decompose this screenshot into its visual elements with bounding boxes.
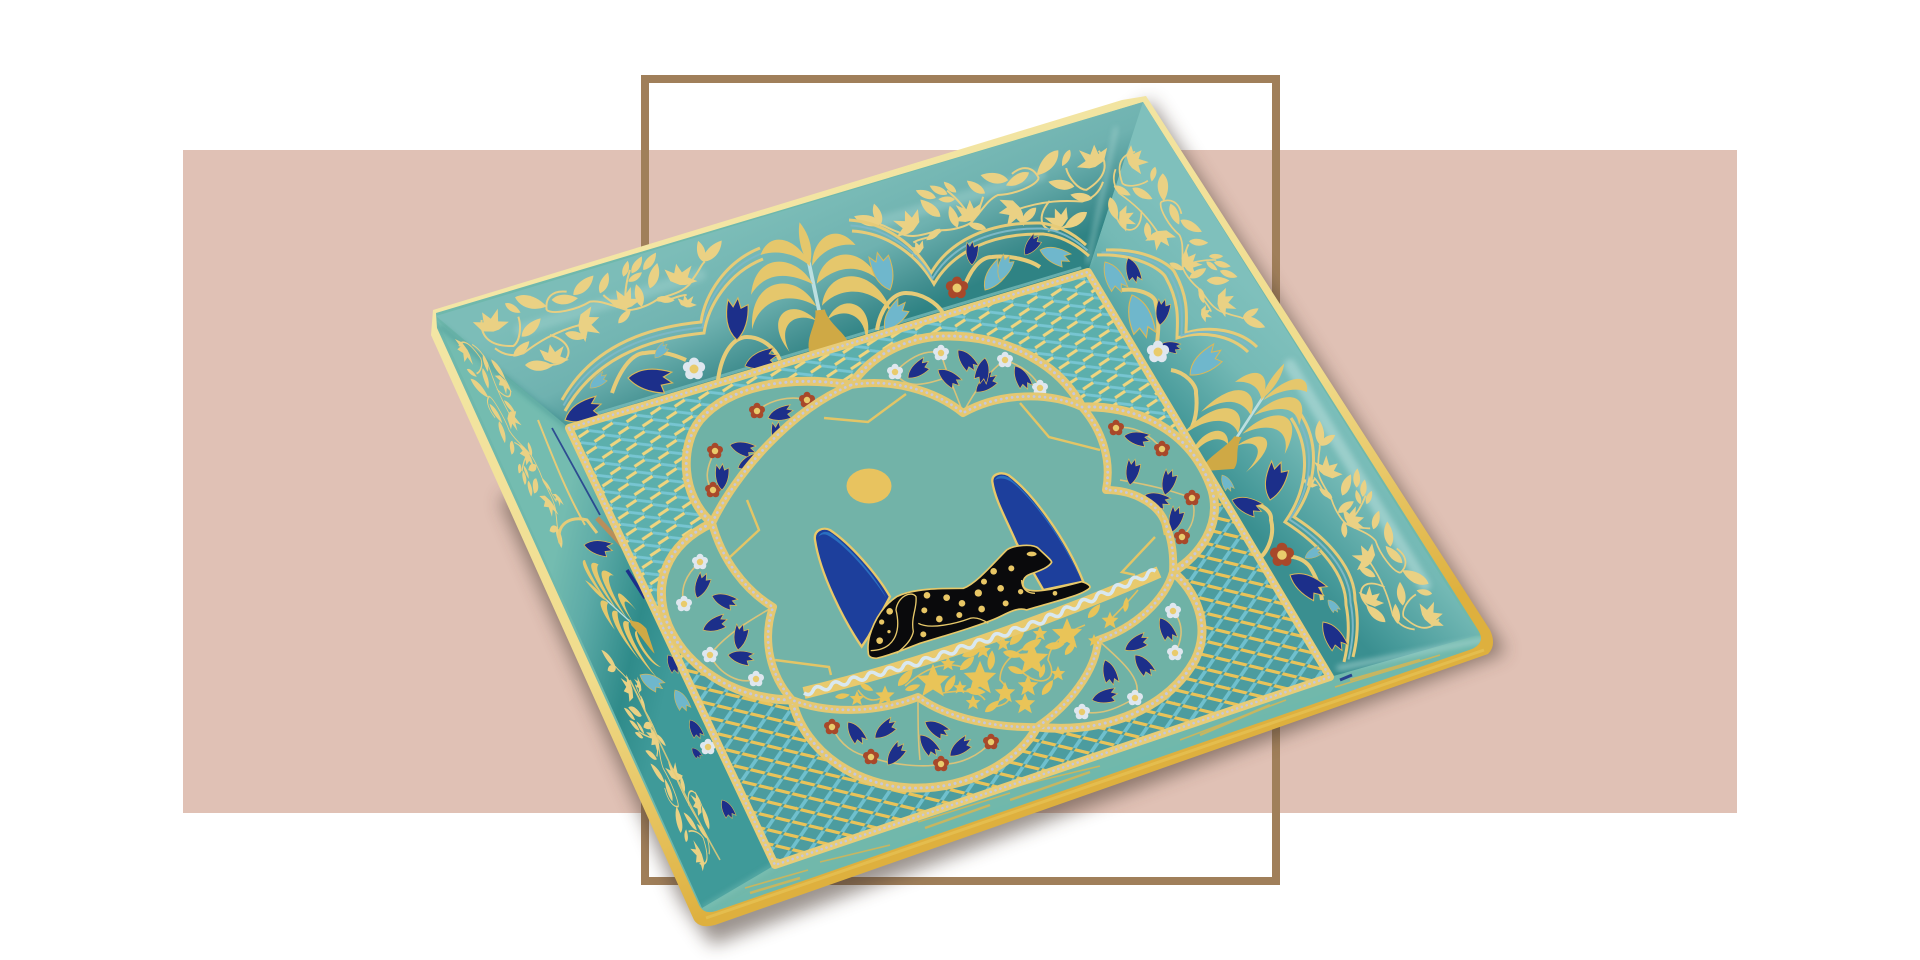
- inner thin gold arches: [730, 394, 1165, 675]
- wall ornaments: double gold arches: [538, 220, 1357, 860]
- left wall: [437, 320, 775, 908]
- left wall reflections: [552, 428, 645, 598]
- lobe flowers: [676, 345, 1200, 771]
- right blue arch: [992, 473, 1083, 590]
- twisted rope: [804, 570, 1159, 695]
- palm motifs: [564, 215, 1340, 694]
- medallion: [661, 336, 1214, 788]
- floor dotted gold border: [569, 272, 1330, 865]
- left blue arch: [815, 529, 890, 647]
- black panther: [868, 545, 1090, 658]
- brown square frame: [645, 79, 1276, 881]
- wall flowers: [683, 277, 1294, 754]
- lobe blue leaves: [688, 345, 1187, 768]
- lobe ornament stems: [683, 352, 1194, 766]
- right wall: [1088, 102, 1478, 677]
- tray floor lattice, upper quadrants: [569, 272, 1330, 865]
- wall blue leaves: [561, 232, 1349, 821]
- floral panel below rope: [835, 588, 1138, 714]
- bottom wall: [703, 640, 1478, 910]
- tray drop shadow: [500, 100, 1506, 945]
- medallion outer ring: [661, 336, 1214, 788]
- bottom rim inner gold line: [706, 650, 1484, 918]
- panther tail and haunch: [871, 580, 1035, 653]
- medallion base: [661, 336, 1214, 788]
- corner creases: [441, 128, 1482, 908]
- medallion inner ring: [712, 383, 1173, 727]
- porcelain tray: [431, 77, 1506, 945]
- bottom wall reflected gilding: [745, 655, 1440, 893]
- top wall: [436, 102, 1143, 428]
- tray floor lattice, lower quadrants: [682, 490, 1330, 865]
- medallion centre field: [712, 383, 1173, 727]
- wall ornaments: gold vines: [455, 144, 1444, 892]
- teal lip: [436, 102, 1481, 912]
- gold outer rim: [431, 96, 1493, 926]
- panther spots: [876, 552, 1057, 644]
- background pink band: [183, 150, 1737, 813]
- gold moon: [846, 468, 892, 504]
